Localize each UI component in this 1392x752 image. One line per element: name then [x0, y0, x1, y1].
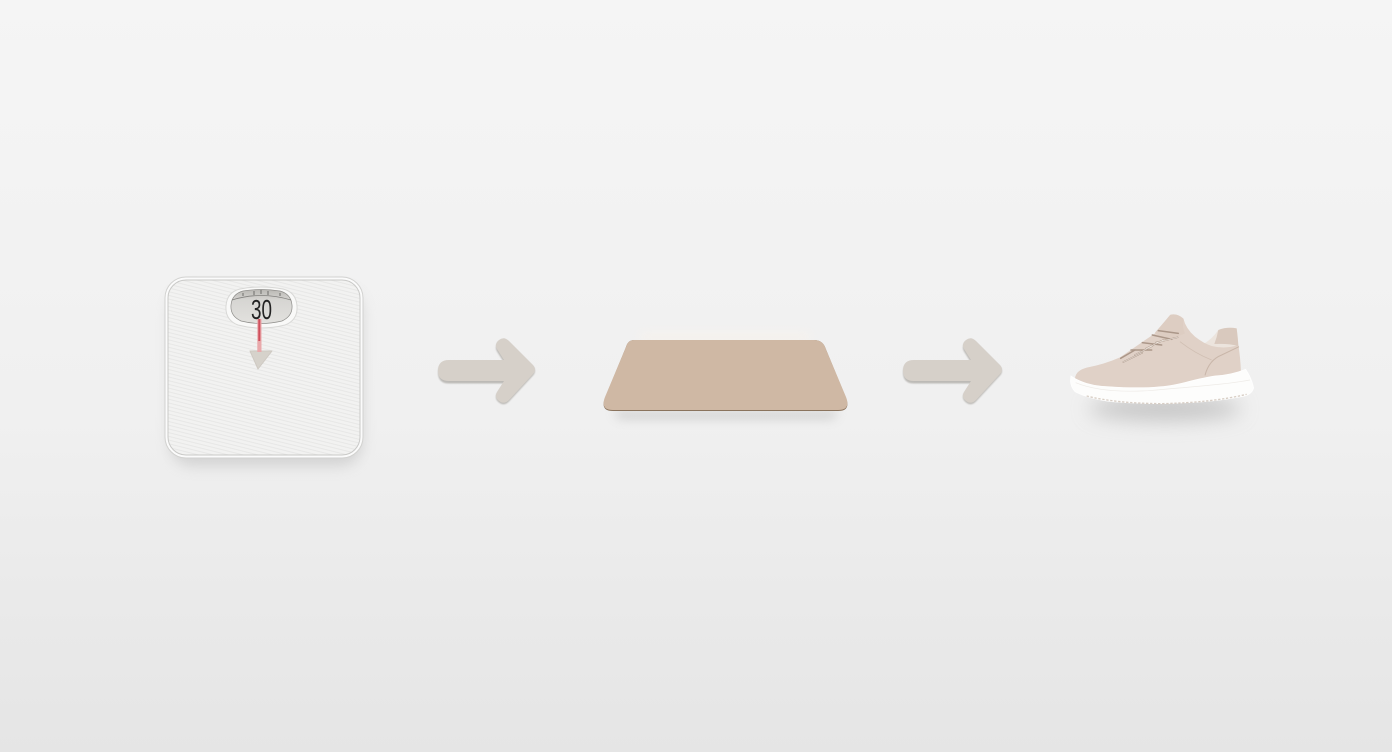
sneaker sole line [1076, 380, 1250, 391]
sneaker tongue [1155, 314, 1185, 342]
icon: sneaker [1070, 314, 1254, 420]
scale reading: 30 [251, 294, 272, 325]
scale needle and pointer [250, 319, 272, 369]
sneaker collar lining [1202, 328, 1239, 358]
scale display window [226, 287, 297, 328]
insole pad [604, 334, 847, 419]
arrow: insole to shoe [903, 338, 1002, 404]
sneaker laces [1121, 331, 1178, 362]
sneaker heel tab [1214, 328, 1238, 346]
icon: bathroom scale [165, 277, 363, 466]
sneaker upper [1075, 314, 1241, 390]
sneaker sole [1070, 369, 1254, 404]
sneaker heel counter seam [1205, 347, 1239, 375]
arrow: scale to insole [438, 338, 535, 404]
